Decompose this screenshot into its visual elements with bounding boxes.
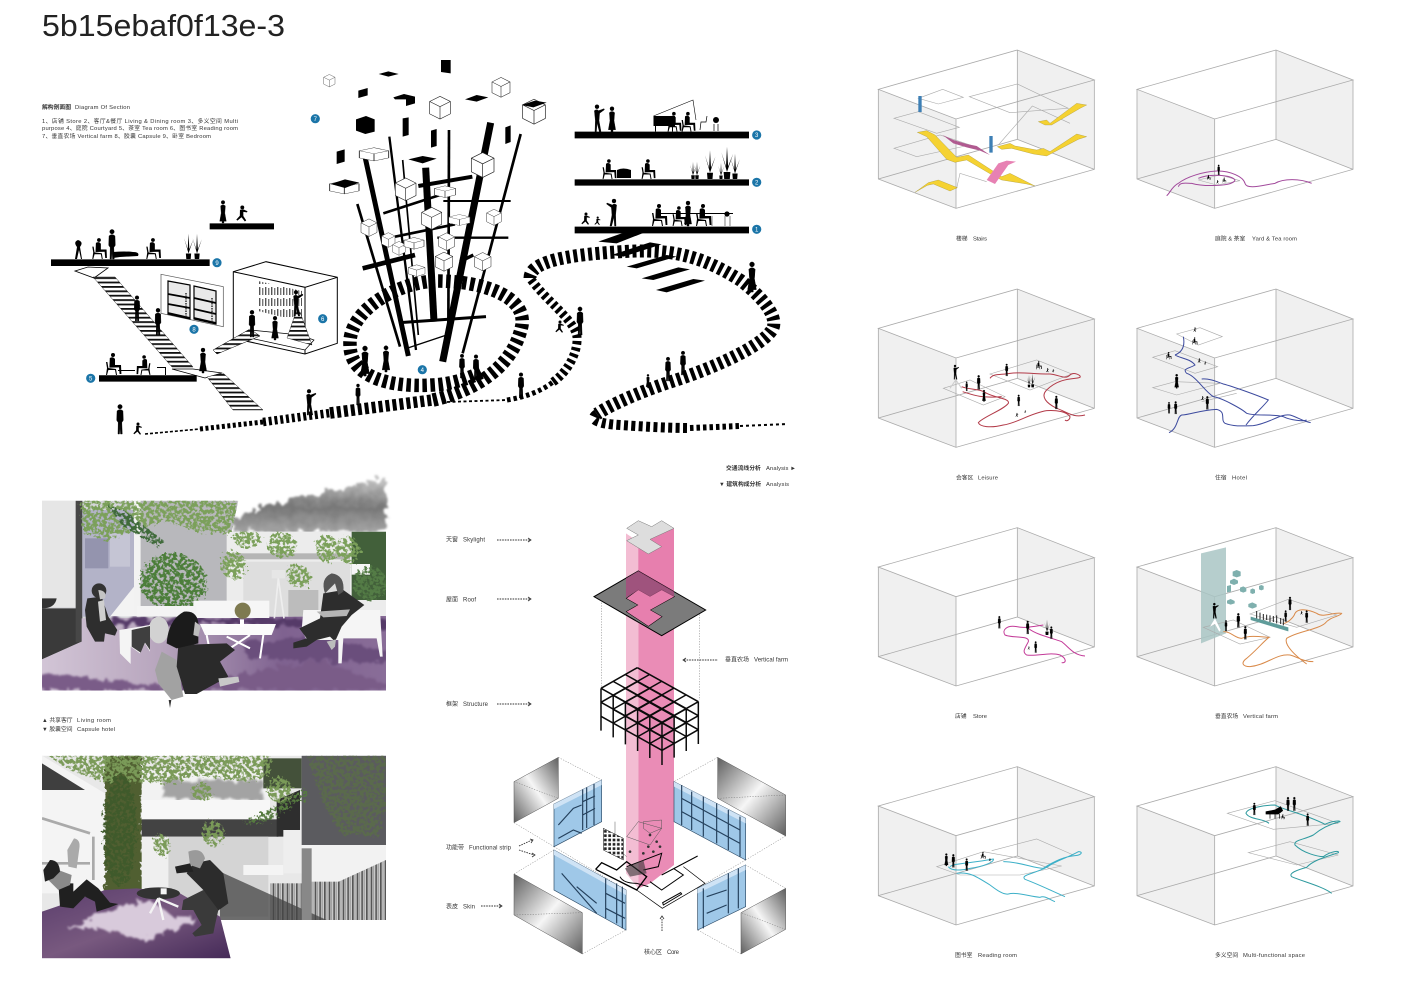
person kneeling [85, 583, 117, 642]
axonometric labels with arrows [446, 536, 788, 956]
walking people on the path [117, 262, 756, 435]
analysis headings: Analysis [766, 482, 789, 488]
level 5 tea room plate [99, 353, 197, 382]
caption: photo titles [42, 716, 115, 733]
text block: section legend: purpose 4、庭院 Courtyard 5、茶室 Tea room 6、图书室 Reading room [42, 124, 238, 132]
axonometric labels with arrows: 表皮 [446, 902, 458, 910]
box captions: Leisure [978, 476, 998, 482]
photographer [175, 850, 228, 937]
box diagram: vertical farm [1137, 528, 1353, 686]
skylight [627, 521, 674, 554]
box captions: 会客区 [956, 474, 974, 482]
box captions: Yard & Tea room [1252, 236, 1297, 242]
capsule bunks [161, 274, 223, 327]
pink vertical farm column [626, 528, 674, 888]
axonometric labels with arrows: Skin [463, 904, 475, 910]
box diagram: hotel [1137, 289, 1353, 447]
core floor plan [596, 820, 705, 908]
text block: section legend [42, 103, 238, 140]
box captions: 庭院 & 茶室 [1215, 234, 1245, 242]
striped ground path [145, 251, 787, 434]
axonometric labels with arrows: 框架 [446, 700, 458, 708]
caption: photo titles: Living room [77, 718, 111, 724]
number badges: 2 [755, 180, 759, 186]
axonometric labels with arrows: 垂直农场 [725, 656, 749, 664]
number badges: 3 [755, 133, 759, 139]
box diagram: reading room [878, 767, 1094, 925]
axonometric labels with arrows: Structure [463, 702, 489, 708]
axonometric labels with arrows: 天窗 [446, 536, 458, 544]
caption: photo titles: ▼ 胶囊空间 [42, 725, 73, 733]
box captions: Vertical farm [1243, 714, 1278, 720]
box captions: 楼梯 [956, 234, 968, 242]
main staircase [75, 267, 263, 410]
vertical farm poles and floating cubes [324, 60, 547, 362]
box captions: 店铺 [955, 712, 967, 720]
analysis headings [719, 464, 796, 488]
box diagram: stairs [878, 50, 1094, 208]
axonometric labels with arrows: Functional strip [469, 846, 512, 852]
analysis headings: ▼ 建筑构成分析 [719, 480, 761, 488]
axonometric labels with arrows: Core [667, 950, 680, 956]
woman lifting child [43, 838, 118, 912]
box captions: Store [973, 714, 987, 720]
number badges: 9 [215, 261, 219, 267]
caption: photo titles: Capsule hotel [77, 727, 115, 733]
box diagram: yard and tea room [1137, 50, 1353, 208]
person seated with backpack [155, 612, 239, 708]
box diagram: leisure [878, 289, 1094, 447]
text block: section legend: 1、店铺 Store 2、客厅&餐厅 Living & Dining room 3、多义空间 Multi [42, 117, 238, 125]
box diagram: multi-functional space [1137, 767, 1353, 925]
text block: section legend: Diagram Of Section [75, 105, 130, 111]
blue functional strips [554, 780, 746, 930]
axonometric labels with arrows: Roof [463, 598, 476, 604]
number badges: 1 [755, 228, 759, 234]
box captions: 图书室 [955, 951, 973, 959]
number badges: 4 [421, 368, 425, 374]
number badges: 7 [314, 117, 318, 123]
floor plates with furniture and people: levels 1-3 [575, 100, 749, 292]
number badges: 6 [321, 317, 325, 323]
axonometric labels with arrows: Vertical farm [754, 658, 788, 664]
box captions: Stairs [973, 236, 987, 242]
axonometric labels with arrows: 功能带 [446, 844, 464, 852]
photo: capsule hotel [42, 756, 386, 958]
box captions: Hotel [1232, 476, 1247, 482]
level 9 bedroom plate [51, 200, 274, 266]
axonometric labels with arrows: Skylight [463, 538, 485, 544]
box captions [955, 234, 1305, 959]
box diagram: store [878, 528, 1094, 686]
number badges: 5 [89, 376, 93, 382]
number badges [86, 114, 761, 383]
reading room box [213, 262, 337, 354]
title: 5b15ebaf0f13e-3 [42, 8, 285, 43]
axonometric labels with arrows: 屋面 [446, 596, 458, 604]
axonometric diagram [514, 521, 786, 954]
roof [594, 571, 706, 636]
caption: photo titles: ▲ 共享客厅 [42, 716, 73, 724]
box captions: 多义空间 [1215, 951, 1238, 959]
axonometric labels with arrows: 核心区 [644, 948, 662, 956]
text block: section legend: 解构剖面图 [42, 103, 71, 111]
box captions: 住宿 [1215, 474, 1227, 482]
analysis headings: Analysis ► [766, 466, 796, 472]
grey skin panels [514, 757, 786, 954]
dashed guide lines [514, 600, 786, 954]
text block: section legend: 7、垂直农场 Vertical farm 8、胶囊 Capsule 9、卧室 Bedroom [42, 132, 211, 140]
number badges: 8 [192, 328, 196, 334]
person seated with ukulele [293, 573, 364, 650]
box captions: Multi-functional space [1243, 953, 1305, 959]
photo: shared living room [42, 477, 387, 708]
box captions: Reading room [978, 953, 1017, 959]
analysis headings: 交通流线分析 [726, 464, 761, 472]
section diagram [51, 60, 787, 435]
mountain ink wash [233, 477, 386, 532]
box captions: 垂直农场 [1215, 712, 1238, 720]
structural frame [601, 668, 698, 765]
